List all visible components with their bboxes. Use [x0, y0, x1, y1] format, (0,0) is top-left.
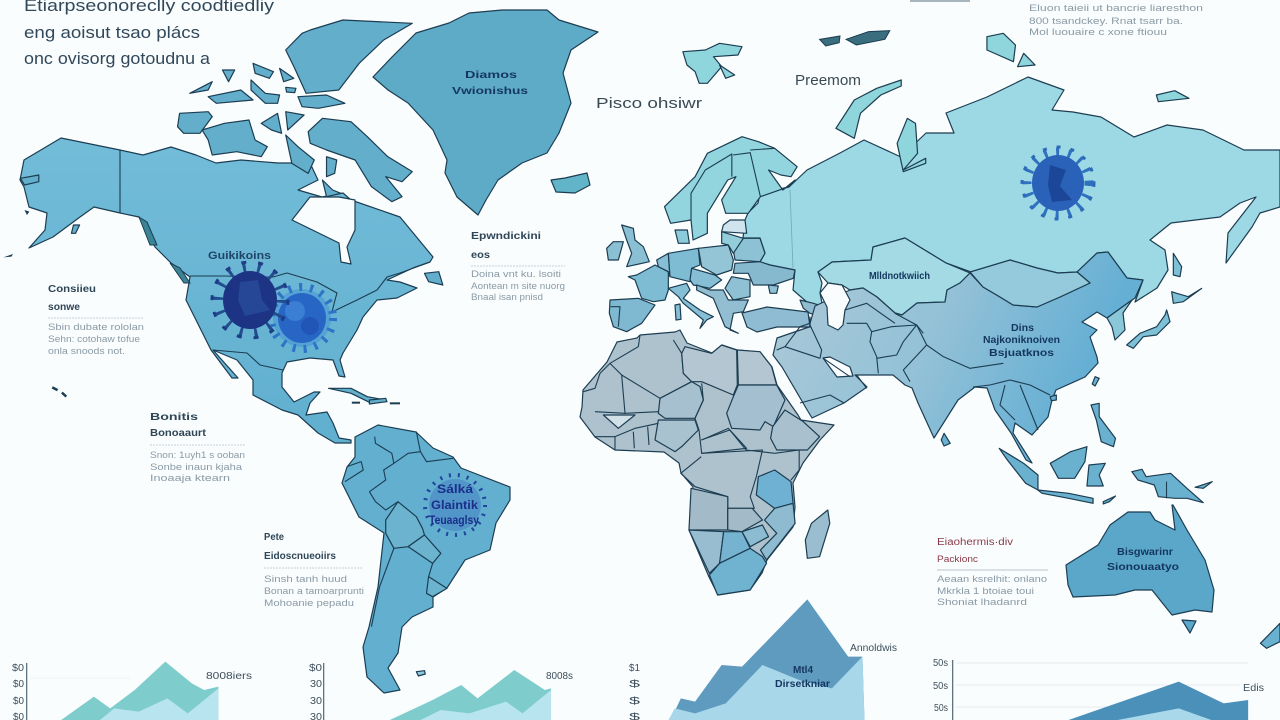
region: Brazil outbreak cluster: Sálká — [437, 482, 473, 496]
chart: teal area 1: 8008iers — [206, 671, 252, 682]
text block: top right — [1029, 3, 1203, 37]
callout: Pacific north: Sehn: cotohaw tofue — [48, 334, 140, 344]
region: Iceland — [551, 173, 590, 193]
region: Caspian Sea — [820, 283, 850, 330]
label: Australia: Bisgwarinr — [1117, 547, 1173, 558]
callout: Pacific north: Sbin dubate rololan — [48, 322, 144, 332]
chart: blue area 3: Annoldwis — [850, 643, 897, 654]
callout: Pacific south: Mohoanie pepadu — [264, 598, 354, 608]
axis labels: 30 — [310, 696, 322, 707]
chart: teal area 1 — [12, 662, 252, 720]
callout: Pacific central: Bonoaaurt — [150, 428, 207, 439]
virus: North America dark — [212, 262, 288, 338]
callout: Indian Ocean red heading: Packionc — [937, 554, 979, 564]
axis labels: $0 — [13, 696, 24, 707]
callout: Indian Ocean red heading: Shoniat lhadanrd — [937, 597, 1027, 607]
callout: Pacific south: Bonan a tamoarprunti — [264, 586, 364, 596]
region: Hudson Bay — [292, 197, 355, 264]
region: Asian mainland — [773, 252, 1143, 463]
region: Japan and Sakhalin — [1127, 253, 1202, 348]
islands: Caribbean and Hawaii — [52, 387, 400, 404]
axis labels — [12, 663, 24, 720]
countries: Europe — [607, 220, 824, 333]
region: North American mainland — [20, 138, 433, 443]
callout: Pacific central: Sonbe inaun kjaha — [150, 462, 242, 472]
islands: Canadian Arctic — [3, 20, 443, 285]
region: Scandinavia — [664, 137, 797, 240]
axis labels: $ — [629, 679, 641, 690]
axis labels: $ — [629, 696, 641, 707]
region: Korean Peninsula — [1107, 300, 1132, 340]
map: Africa — [580, 330, 834, 595]
label: Australia: Sionouaatyo — [1107, 562, 1179, 573]
axis labels: $1 — [629, 663, 640, 674]
axis labels: 30 — [310, 679, 322, 690]
region: Mongolia — [970, 260, 1090, 307]
text block: top right: Eluon taieii ut bancrie liaresthon — [1029, 3, 1203, 13]
label: Greenland — [452, 70, 529, 97]
country: France — [628, 265, 668, 302]
axis labels: $0 — [13, 679, 24, 690]
label: China: Bsjuatknos — [989, 348, 1055, 359]
title — [24, 0, 275, 68]
title: eng aoisut tsao plács — [24, 23, 200, 42]
chart: blue area 4 — [933, 658, 1264, 720]
map: Scandinavia and Europe — [607, 137, 824, 333]
map: Australia — [1066, 505, 1214, 633]
callout: Pacific central — [150, 412, 245, 483]
divider: Russia west line — [790, 190, 793, 268]
virus: Russia — [1022, 147, 1094, 219]
borders: Canada and United States — [120, 150, 430, 370]
axis labels — [629, 663, 641, 720]
text block: top right: 800 tsandckey. Rnat tsarr ba. — [1029, 16, 1183, 26]
callout: North Atlantic: Aontean m site nuorg — [471, 281, 565, 291]
callout: Pacific south — [264, 532, 364, 608]
chart: blue area 4: Edis — [1243, 683, 1264, 694]
callout: Indian Ocean red heading: Mkrkla 1 btoiae toui — [937, 586, 1034, 596]
callout: North Atlantic: eos — [471, 250, 490, 261]
axis labels: 50s — [933, 681, 948, 692]
label: China: Najkoniknoiven — [983, 335, 1060, 346]
callout: North Atlantic: Bnaal isan pnisd — [471, 292, 543, 302]
callout: Pacific north — [48, 284, 144, 356]
region: Brazil outbreak cluster: Glaintik — [431, 498, 478, 512]
callout: Pacific central: Inoaaja ktearn — [150, 473, 230, 483]
callout: Indian Ocean red heading: Aeaan ksrelhit: onlano — [937, 574, 1047, 584]
callout: North Atlantic: Doina vnt ku. lsoiti — [471, 269, 561, 279]
region: Brazil outbreak cluster: Teuaaglsy — [429, 513, 479, 527]
chart: teal area 2: 8008s — [546, 671, 573, 682]
countries: South American borders — [345, 432, 453, 676]
label: Australia — [1107, 547, 1179, 573]
countries: North and West African borders — [583, 335, 785, 453]
label: Arctic heading: Preemom — [795, 72, 861, 89]
callout: Pacific north: onla snoods not. — [48, 346, 125, 356]
chart: blue area 3 — [629, 599, 897, 720]
callout: North Atlantic — [471, 231, 565, 302]
region: Tasmania — [1182, 620, 1196, 633]
map: Greenland — [373, 10, 598, 215]
label: North American virus: Guikikoins — [208, 250, 271, 262]
borders: Central and South Asia — [777, 303, 1003, 388]
region: Kazakhstan — [818, 238, 970, 315]
country: United Kingdom — [622, 225, 649, 267]
label: Kazakhstan: Mlldnotkwiich — [869, 271, 930, 282]
map: Russia and northern Asia — [683, 31, 1280, 315]
label: China — [983, 323, 1060, 359]
virus: North America bright — [271, 287, 333, 349]
country: Ireland — [607, 242, 623, 260]
label: Greenland: Vwionishus — [452, 86, 529, 97]
axis labels: 50s — [933, 658, 948, 669]
mark: top dash — [910, 0, 970, 2]
region: Southeast Asian islands — [941, 377, 1280, 648]
region: Turkey — [742, 307, 810, 332]
callout: North Atlantic: Epwndickini — [471, 231, 541, 242]
label: ocean heading: Pisco ohsiwr — [596, 95, 702, 112]
region: Greenland landmass — [373, 10, 598, 215]
title: onc ovisorg gotoudnu a — [24, 49, 211, 68]
callout: Indian Ocean red heading: Eiaohermis·div — [937, 537, 1013, 548]
region: Persian Gulf — [823, 357, 853, 377]
region: Russia — [743, 77, 1280, 308]
region: Africa landmass — [580, 330, 834, 595]
region: Australia landmass — [1066, 505, 1214, 615]
text block: top right: Mol luouaire c xone ftiouu — [1029, 27, 1167, 37]
map: North America — [3, 20, 443, 443]
callout: Pacific south: Pete — [264, 532, 284, 543]
map: South America — [342, 425, 510, 693]
axis labels — [933, 658, 948, 714]
axis labels — [309, 663, 323, 720]
chart: blue area 3: Dirsetkniar — [775, 679, 830, 690]
callout: Pacific central: Snon: 1uyh1 s ooban — [150, 450, 245, 460]
callout: Pacific north: sonwe — [48, 302, 80, 313]
callout: Pacific south: Sinsh tanh huud — [264, 574, 347, 584]
axis labels: $0 — [12, 663, 24, 674]
map: Middle East, South and East Asia — [742, 252, 1280, 648]
axis labels: $0 — [309, 663, 323, 674]
callout: Pacific south: Eidoscnueoiirs — [264, 551, 336, 562]
callout: Pacific north: Consiieu — [48, 284, 96, 295]
label: China: Dins — [1011, 323, 1034, 334]
chart: teal area 2 — [309, 663, 573, 720]
axis labels: 50s — [934, 703, 948, 714]
callout: Pacific central: Bonitis — [150, 412, 199, 423]
chart: blue area 3: Mtl4 — [793, 665, 813, 676]
region: South American landmass — [342, 425, 510, 693]
callout: Indian Ocean red heading — [937, 537, 1048, 607]
countries: Central and Southern African borders — [681, 410, 830, 595]
islands: Russian Arctic — [683, 31, 1189, 172]
label: Greenland: Diamos — [465, 70, 518, 81]
region: Brazil outbreak cluster — [425, 475, 485, 535]
